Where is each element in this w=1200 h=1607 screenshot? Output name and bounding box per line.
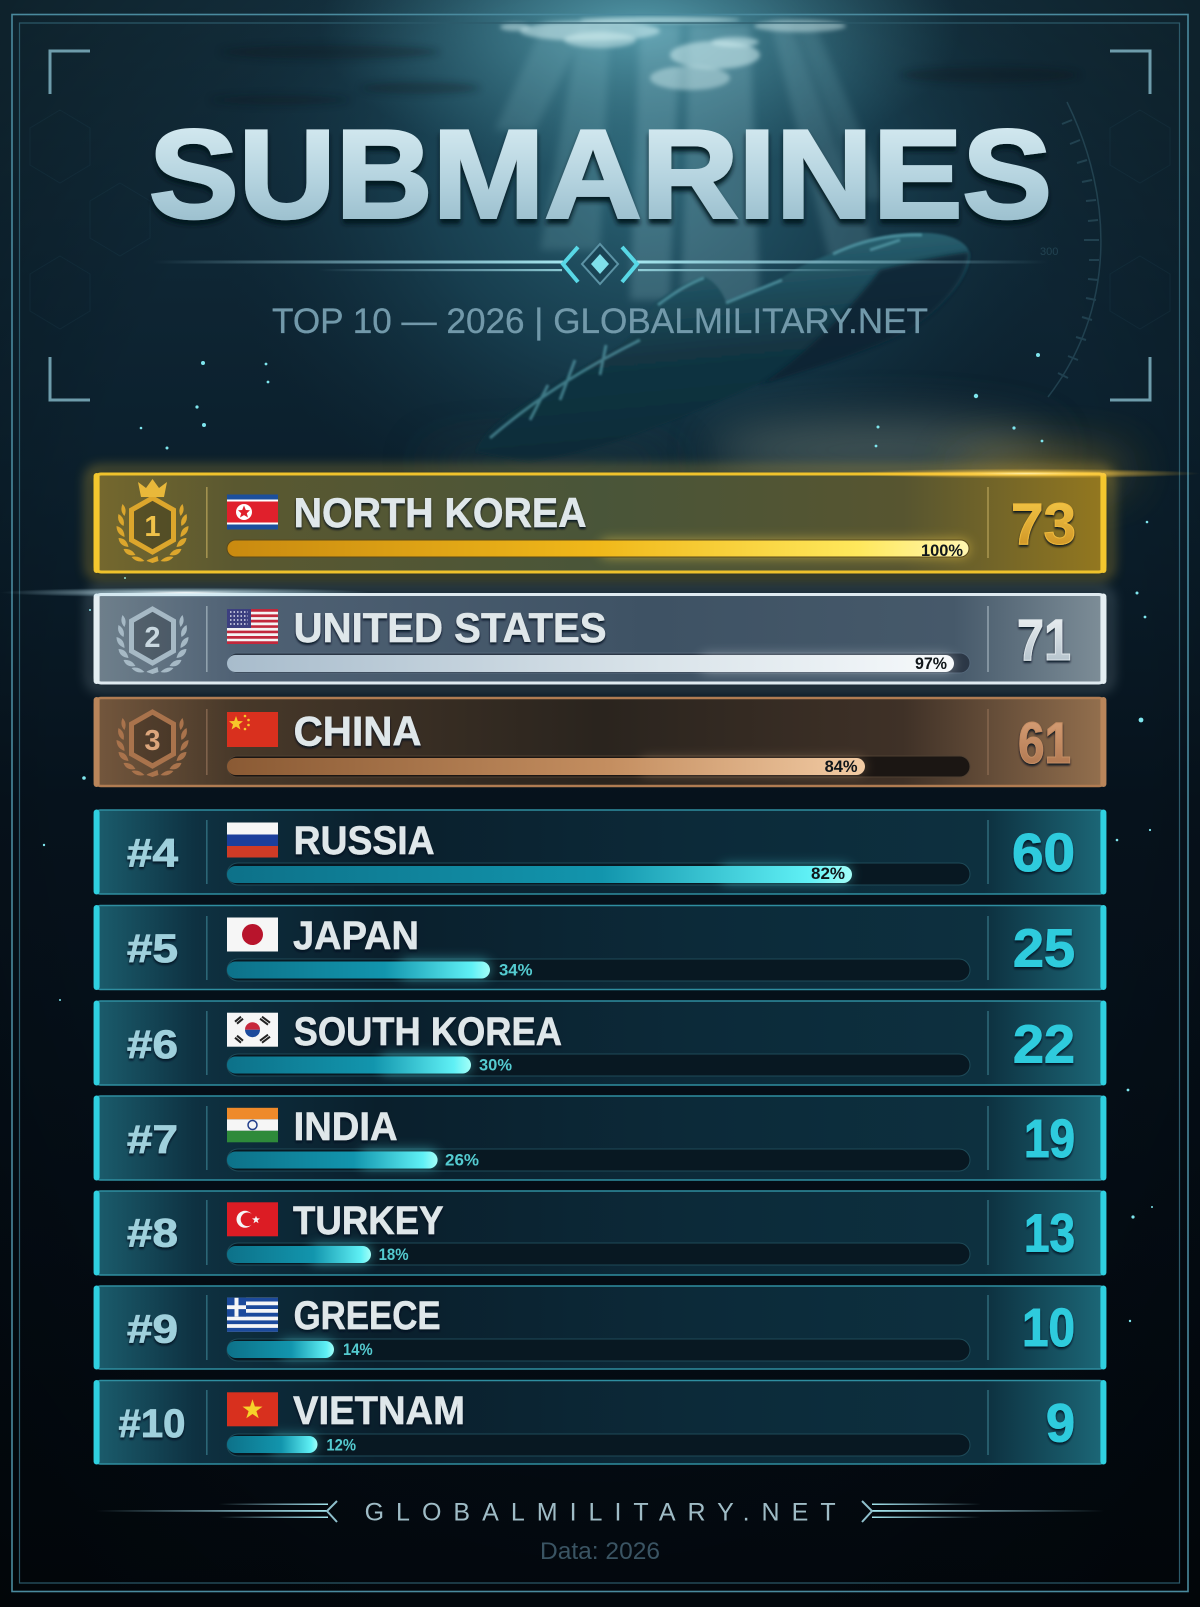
- footer ornament left: [96, 1501, 337, 1522]
- panel: [94, 1191, 1106, 1275]
- footer ornament right: [862, 1501, 1104, 1522]
- bar glow: [600, 540, 969, 557]
- panel: [95, 594, 1105, 683]
- bar glow: [720, 865, 851, 883]
- panel: [95, 474, 1105, 572]
- panel: [94, 810, 1106, 894]
- panel glow: [90, 590, 1110, 688]
- rank: #6: [127, 1023, 178, 1067]
- country name: UNITED STATES: [294, 604, 607, 651]
- light rays: [495, 20, 890, 320]
- row 10: Vietnam: [94, 1380, 1106, 1464]
- percent: 30%: [479, 1056, 512, 1075]
- bar: [227, 655, 954, 672]
- country name: CHINA: [294, 708, 422, 755]
- bar glow: [700, 655, 954, 672]
- bar track: [227, 863, 970, 885]
- panel: [94, 1001, 1106, 1085]
- bar glow: [400, 960, 490, 978]
- bar track: [227, 1054, 970, 1076]
- percent: 84%: [825, 757, 858, 776]
- rank badge: [116, 479, 188, 563]
- row 3: China: [94, 697, 1106, 787]
- decorative gauge arc: [1040, 102, 1101, 397]
- bar: [227, 866, 852, 883]
- row 5: Japan: [94, 905, 1106, 990]
- decorative gauge arc: 300: [1040, 246, 1058, 258]
- flag: China: [227, 712, 278, 747]
- row 1: North Korea: [90, 468, 1200, 576]
- subtitle: TOP 10 — 2026 | GLOBALMILITARY.NET: [272, 302, 928, 341]
- bar glow: [360, 1150, 438, 1168]
- country name: NORTH KOREA: [294, 489, 587, 536]
- bar track: [227, 1339, 970, 1361]
- value: 61: [1018, 711, 1071, 776]
- row 6: South Korea: [94, 1000, 1106, 1086]
- percent: 18%: [379, 1245, 409, 1264]
- row 8: Turkey: [94, 1190, 1106, 1276]
- bar glow: [380, 1055, 471, 1073]
- row 2: United States: [0, 588, 1110, 688]
- country name: SOUTH KOREA: [294, 1010, 562, 1054]
- flag: North Korea: [227, 494, 278, 530]
- value: 19: [1024, 1109, 1075, 1169]
- percent: 34%: [499, 961, 532, 980]
- value: 73: [1011, 492, 1076, 557]
- flag: Russia: [227, 822, 278, 858]
- bar track: [227, 959, 970, 981]
- country name: RUSSIA: [294, 819, 435, 863]
- row 7: India: [94, 1096, 1106, 1180]
- bar glow: [270, 1435, 317, 1453]
- bar: [227, 1341, 334, 1358]
- title: SUBMARINES: [149, 104, 1052, 244]
- panel: [95, 698, 1105, 786]
- bar: [227, 1436, 318, 1453]
- bar track: [227, 1243, 970, 1265]
- rank badge: 2: [144, 622, 161, 654]
- panel: [94, 906, 1106, 990]
- percent: 12%: [326, 1436, 356, 1455]
- panel: [94, 1096, 1106, 1180]
- row 4: Russia: [94, 810, 1106, 894]
- percent: 26%: [445, 1151, 479, 1170]
- value: 25: [1013, 919, 1075, 979]
- bar glow: [640, 758, 865, 775]
- bar track: [227, 653, 970, 673]
- lens flare: [850, 468, 1200, 478]
- title divider with diamond emblem: [153, 244, 1048, 284]
- lens flare: [0, 588, 370, 598]
- rank badge: 3: [144, 725, 161, 757]
- data note: Data: 2026: [540, 1538, 660, 1565]
- bar track: [227, 1434, 970, 1456]
- dark surface ripples: [210, 45, 1080, 105]
- value: 10: [1022, 1298, 1075, 1358]
- rank: #5: [127, 927, 178, 971]
- flag: South Korea: [227, 1013, 278, 1047]
- bar: [227, 1056, 471, 1074]
- country name: GREECE: [294, 1294, 441, 1338]
- country name: TURKEY: [293, 1199, 444, 1243]
- bar track: [227, 1149, 970, 1171]
- bar glow: [310, 1245, 371, 1263]
- rank: #10: [119, 1402, 185, 1446]
- country name: INDIA: [294, 1105, 398, 1149]
- decorative hexagon grid: [30, 110, 1170, 329]
- bar: [227, 1152, 438, 1168]
- country name: JAPAN: [293, 914, 419, 958]
- percent: 82%: [811, 864, 845, 883]
- bar: [227, 962, 490, 978]
- flag: Vietnam: [227, 1392, 278, 1426]
- flag: Japan: [227, 918, 278, 952]
- hull highlights: [490, 235, 922, 438]
- flag: Greece: [227, 1298, 278, 1332]
- footer text: GLOBALMILITARY.NET: [365, 1499, 836, 1527]
- percent: 14%: [343, 1340, 373, 1359]
- value: 9: [1046, 1394, 1075, 1454]
- corner brackets: [50, 51, 1150, 400]
- value: 13: [1024, 1204, 1075, 1264]
- surface highlights: [500, 17, 846, 90]
- nose shadow: [760, 252, 969, 385]
- flag: India: [227, 1108, 278, 1142]
- rank: #8: [127, 1212, 178, 1256]
- flag: Turkey: [227, 1202, 278, 1236]
- seabed haze and gold glow: [420, 422, 1130, 484]
- bar: [227, 1246, 371, 1263]
- bar glow: [280, 1340, 334, 1358]
- submarine silhouette: [476, 233, 970, 462]
- percent: 97%: [915, 654, 947, 673]
- rank badge: 1: [144, 511, 161, 543]
- bar: [227, 758, 865, 775]
- bar track: [227, 756, 970, 777]
- rank badge: [116, 712, 188, 777]
- panel: [94, 1380, 1106, 1464]
- panel: [94, 1286, 1106, 1369]
- bar: [227, 540, 969, 557]
- country name: VIETNAM: [293, 1389, 465, 1433]
- panel glow: [90, 470, 1110, 576]
- flag: United States: [227, 609, 278, 644]
- value: 60: [1012, 823, 1075, 883]
- rank badge: [116, 609, 188, 674]
- rank: #4: [127, 832, 178, 876]
- row 9: Greece: [94, 1286, 1106, 1370]
- particles: [43, 353, 1153, 1322]
- value: 22: [1013, 1014, 1075, 1074]
- percent: 100%: [921, 541, 963, 560]
- rank: #9: [127, 1308, 178, 1352]
- rank: #7: [127, 1118, 178, 1162]
- value: 71: [1017, 608, 1071, 673]
